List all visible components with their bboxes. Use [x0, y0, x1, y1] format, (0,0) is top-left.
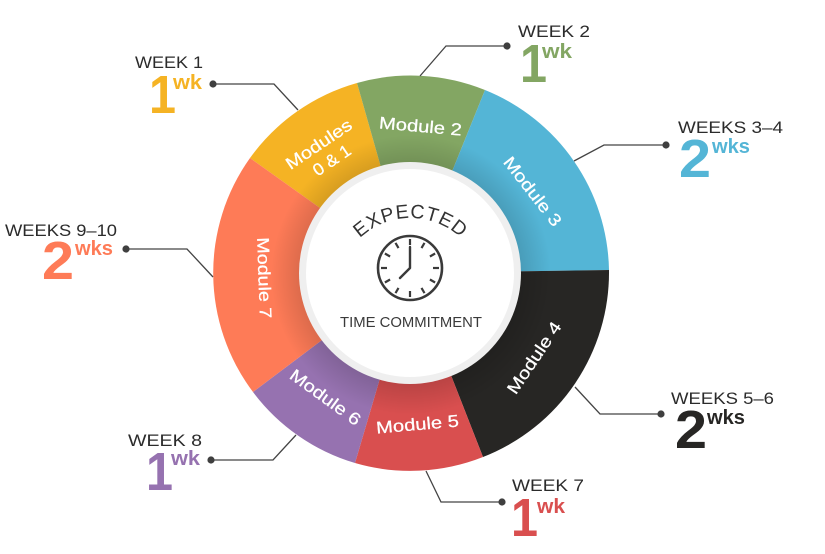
callout: weeks 3-4: wks [711, 136, 750, 158]
segment: Module 6 [253, 273, 411, 463]
segment: Module 5 [355, 273, 483, 471]
center circle [299, 162, 521, 384]
label: Module 3: Module 3 [499, 153, 565, 230]
label: Module 7: Module 7 [253, 237, 275, 319]
callout: weeks 9-10: WEEKS 9–10 [5, 222, 117, 240]
label: Modules 0 & 1: Modules [282, 115, 356, 174]
label: Modules 0 & 1: 0 & 1 [309, 141, 355, 180]
curved heading: EXPECTED: EXPECTED [352, 204, 466, 237]
callout: week 8: wk [170, 448, 201, 470]
callout: week 2: wk [541, 41, 573, 63]
label: Module 5: Module 5 [375, 411, 460, 438]
callout: week 1: 1 [149, 65, 176, 125]
callout: weeks 5-6: 2 [675, 400, 707, 460]
donut chart: module segments [213, 76, 609, 471]
segment: Module 4 [411, 270, 609, 457]
callout: week 1 [135, 54, 298, 125]
segment: Module 7 [213, 158, 411, 392]
callout: week 1: WEEK 1 [135, 54, 203, 72]
callout: week 7: 1 [511, 488, 538, 548]
callout: week 7 [426, 471, 584, 548]
caption: TIME COMMITMENT: TIME COMMITMENT [340, 315, 482, 331]
callout: week 2: 1 [520, 34, 547, 94]
callout: weeks 9-10: wks [74, 238, 113, 260]
label: Module 6: Module 6 [286, 365, 364, 430]
segment: Module 3 [411, 90, 609, 273]
segment: Module 2 [357, 76, 485, 273]
callout: week 2 [420, 23, 590, 94]
callout: week 8 [128, 432, 296, 502]
label: Module 4: Module 4 [503, 318, 566, 398]
callout: weeks 3-4 [574, 119, 783, 189]
segment: Modules 0 & 1 [250, 83, 411, 273]
callout: week 8: 1 [146, 442, 173, 502]
callout: weeks 5-6 [575, 387, 774, 460]
icon: clock [378, 236, 442, 300]
callout: week 7: wk [536, 496, 566, 518]
callout: week 8: WEEK 8 [128, 432, 202, 450]
callout: week 7: WEEK 7 [512, 477, 584, 495]
callout: week 1: wk [172, 72, 203, 94]
callout: week 2: WEEK 2 [518, 23, 590, 41]
label: Module 2: Module 2 [378, 113, 463, 140]
callout: weeks 5-6: WEEKS 5–6 [671, 390, 774, 408]
callout: weeks 3-4: WEEKS 3–4 [678, 119, 783, 137]
callout: weeks 3-4: 2 [679, 129, 711, 189]
callout: weeks 5-6: wks [706, 407, 745, 429]
callout: weeks 9-10: 2 [42, 231, 74, 291]
label: Modules 0 & 1 [282, 115, 356, 180]
callout: weeks 9-10 [5, 222, 213, 291]
